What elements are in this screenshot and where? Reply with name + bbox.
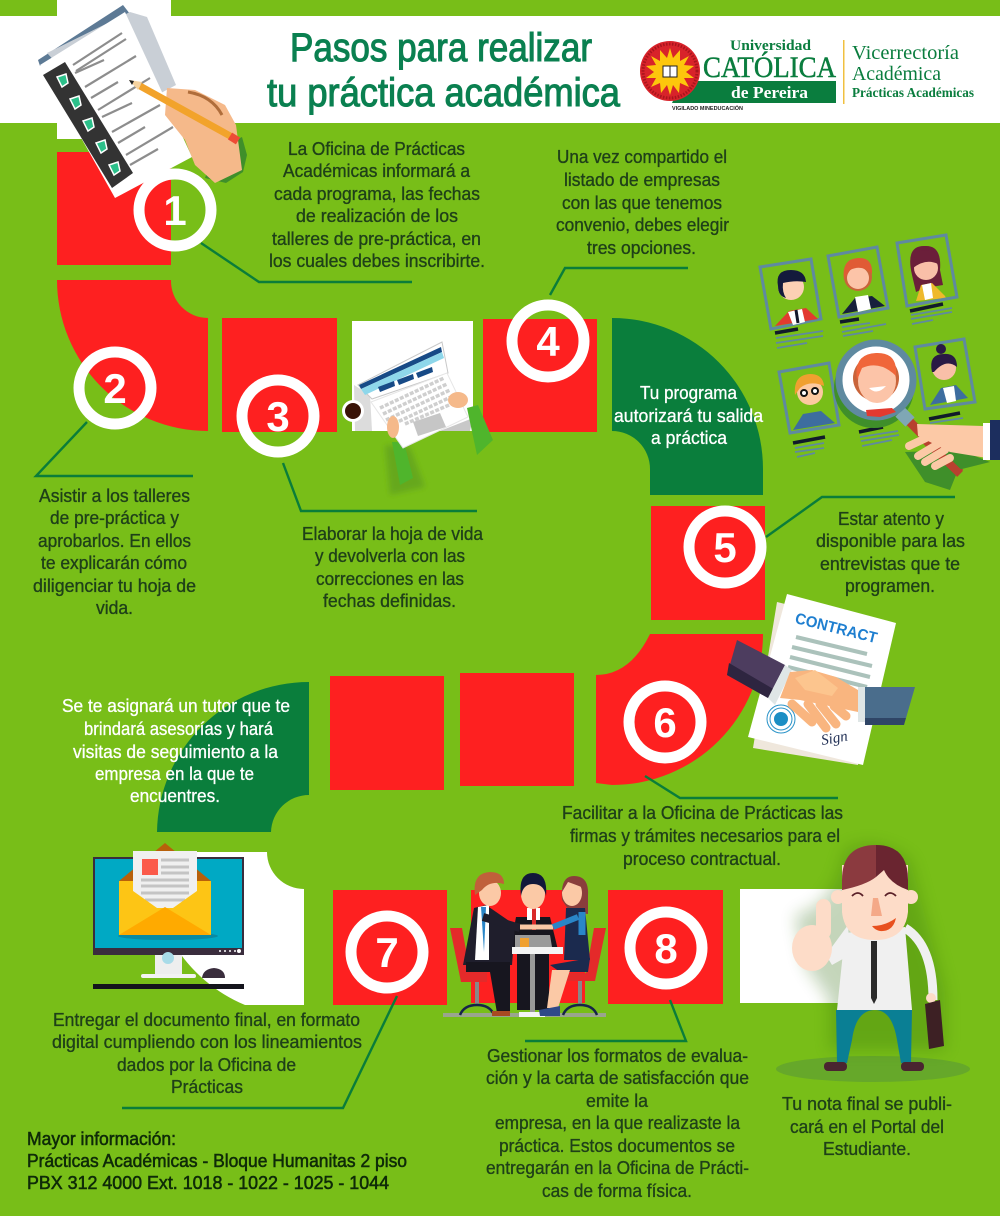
board path: curve 6 [596, 634, 763, 785]
text: program authorisation [614, 382, 764, 448]
text: step 7: Prácticas [171, 1076, 243, 1097]
text: program authorisation: Tu programa [640, 382, 738, 403]
text: step 1: cada programa, las fechas [274, 183, 480, 204]
portrait 3 [897, 235, 957, 324]
step marker 8 [630, 912, 702, 984]
hand [792, 899, 832, 971]
text: contact information: Mayor información: [27, 1128, 176, 1149]
text: step 2 [33, 485, 196, 618]
logo: Universidad Católica de Pereira: Vicerrectoría [852, 42, 959, 64]
text: contact information: Prácticas Académicas - Bloque Humanitas 2 piso [27, 1150, 407, 1171]
step marker 2: 2 [103, 365, 127, 412]
text: step 1: talleres de pre-práctica, en [272, 228, 481, 249]
text: program authorisation: a práctica [651, 427, 728, 448]
text: tutor: brindará asesorías y hará [84, 718, 274, 739]
step marker 7: 7 [375, 929, 399, 976]
step marker 4: 4 [536, 318, 560, 365]
icon: email on monitor [93, 843, 244, 989]
head [831, 845, 918, 940]
text: step 4: con las que tenemos [562, 192, 722, 213]
ground shadow [776, 1056, 970, 1082]
title [267, 26, 621, 115]
arm and briefcase [905, 928, 933, 1000]
logo seal [640, 41, 700, 101]
shirt [837, 927, 912, 1010]
text: step 8: empresa, en la que realizaste la [495, 1112, 741, 1133]
step marker 3: 3 [266, 393, 290, 440]
text: step 7: digital cumpliendo con los lineamientos [52, 1031, 362, 1052]
magnifier [834, 343, 960, 473]
text: step 8: ción y la carta de satisfacción que [486, 1067, 749, 1088]
board path: final white square [740, 889, 855, 1003]
board path: square 4 [483, 319, 597, 432]
text: step 2: aprobarlos. En ellos [38, 530, 191, 551]
text: step 7: dados por la Oficina de [117, 1054, 296, 1075]
board path: blank square left [330, 676, 444, 790]
step marker 2 [79, 352, 151, 424]
right chair [560, 928, 606, 1015]
text: step 6: proceso contractual. [623, 848, 781, 869]
step marker 5: 5 [713, 524, 737, 571]
header band [0, 0, 1000, 139]
text: step 5: programen. [845, 575, 935, 596]
board path: white panel with laptop [352, 321, 473, 431]
board path: curve 2 [57, 280, 208, 431]
board path: meeting square [471, 890, 585, 1003]
text: tutor: empresa en la que te [95, 763, 254, 784]
table and laptop [512, 935, 563, 1017]
text: step 8: práctica. Estos documentos se [499, 1135, 735, 1156]
text: tutor [62, 695, 290, 806]
logo: Universidad Católica de Pereira: de Pereira [731, 83, 809, 102]
text: final grade: Estudiante. [823, 1138, 911, 1159]
text: step 4: listado de empresas [564, 169, 720, 190]
board path: square 5 [651, 506, 765, 620]
tie [871, 941, 877, 1004]
text: step 8: Gestionar los formatos de evalua- [487, 1045, 748, 1066]
text: step 1: Académicas informará a [283, 160, 471, 181]
text: step 4: convenio, debes elegir [556, 214, 729, 235]
woman [520, 876, 590, 1016]
text: tutor: encuentres. [130, 785, 220, 806]
board path: blank square right [460, 673, 574, 786]
step marker 4 [512, 305, 584, 377]
text: step 8 [486, 1045, 749, 1201]
middle man [510, 873, 558, 1010]
text: final grade [782, 1093, 952, 1159]
text: step 1: La Oficina de Prácticas [288, 138, 465, 159]
hand holding magnifier [905, 420, 1000, 490]
text: step 5: disponible para las [816, 530, 965, 551]
text: step 3 [302, 523, 484, 611]
logo: Universidad Católica de Pereira: Prácticas Académicas [852, 85, 974, 100]
board path: green curve [612, 318, 763, 495]
text: step 2: de pre-práctica y [50, 507, 180, 528]
icon: business meeting [443, 872, 606, 1017]
text: step 5: entrevistas que te [820, 553, 960, 574]
text: step 2: diligenciar tu hoja de [33, 575, 196, 596]
board path: square 3 [222, 318, 337, 432]
icon: happy man with thumbs up [776, 844, 970, 1082]
text: tutor: Se te asignará un tutor que te [62, 695, 290, 716]
portrait 5 [915, 339, 975, 423]
step marker 8: 8 [654, 925, 678, 972]
icon: candidate portraits with magnifier [760, 235, 1000, 490]
text: step 5: Estar atento y [838, 508, 945, 529]
text: step 7 [52, 1009, 362, 1097]
portrait 2 [828, 247, 888, 336]
board path: white curve 7 [151, 852, 304, 1005]
text: step 2: te explicarán cómo [41, 552, 187, 573]
step marker 7 [351, 916, 423, 988]
title: Pasos para realizar [290, 26, 592, 70]
text: final grade: Tu nota final se publi- [782, 1093, 952, 1114]
text: contact information [27, 1128, 407, 1193]
logo: Universidad Católica de Pereira: Universidad [730, 38, 811, 54]
text: step 3: y devolverla con las [315, 545, 465, 566]
text: tutor: visitas de seguimiento a la [73, 741, 279, 762]
text: step 8: cas de forma física. [542, 1180, 692, 1201]
logo: Universidad Católica de Pereira: VIGILADO MINEDUCACIÓN [672, 104, 743, 112]
text: step 1 [269, 138, 485, 271]
step marker 5 [689, 511, 761, 583]
text: step 5 [816, 508, 965, 596]
text: step 1: de realización de los [296, 205, 458, 226]
icon: laptop with hands [342, 342, 493, 495]
text: step 8: emite la [586, 1090, 649, 1111]
text: step 3: correcciones en las [316, 568, 464, 589]
text: step 2: Asistir a los talleres [39, 485, 190, 506]
step marker 6: 6 [653, 699, 677, 746]
text: step 8: entregarán en la Oficina de Prácti- [486, 1157, 749, 1178]
step marker 1: 1 [163, 187, 187, 234]
left chair [450, 928, 494, 1015]
logo: Universidad Católica de Pereira: Académica [852, 63, 941, 85]
text: step 3: fechas definidas. [323, 590, 456, 611]
board path: square 7 [333, 890, 447, 1005]
text: step 6: firmas y trámites necesarios para el [570, 825, 840, 846]
portrait 4 [779, 363, 839, 457]
text: program authorisation: autorizará tu salida [614, 405, 764, 426]
step marker 6 [629, 686, 701, 758]
step marker 1 [139, 174, 211, 246]
text: step 7: Entregar el documento final, en formato [53, 1009, 360, 1030]
board path: tutor green curve [157, 682, 309, 832]
board path: square 1 [57, 152, 171, 265]
text: contact information: PBX 312 4000 Ext. 1018 - 1022 - 1025 - 1044 [27, 1172, 389, 1193]
logo: Universidad Católica de Pereira [640, 38, 974, 112]
text: step 1: los cuales debes inscribirte. [269, 250, 485, 271]
text: step 2: vida. [96, 597, 133, 618]
text: step 6: Facilitar a la Oficina de Prácticas las [562, 802, 843, 823]
text: step 3: Elaborar la hoja de vida [302, 523, 484, 544]
icon: contract and handshake: CONTRACT [793, 610, 879, 647]
text: step 4 [556, 146, 729, 258]
text: step 4: Una vez compartido el [557, 146, 727, 167]
board path: square 8 [608, 890, 723, 1004]
soft glow behind figure [795, 844, 945, 1050]
step marker 3 [242, 380, 314, 452]
text: step 6 [562, 802, 843, 869]
title: tu práctica académica [267, 71, 621, 115]
left man [463, 872, 520, 1016]
logo: Universidad Católica de Pereira: CATÓLICA [703, 51, 836, 84]
icon: contract and handshake: Sign [820, 729, 849, 749]
shoes [824, 1062, 924, 1071]
trousers [836, 1010, 912, 1063]
icon: checklist and hand with pencil [38, 5, 247, 198]
icon: contract and handshake [727, 594, 915, 765]
text: step 4: tres opciones. [587, 237, 696, 258]
connector lines [36, 243, 955, 1108]
logo green bar [672, 81, 836, 103]
portrait 1 [760, 259, 823, 348]
text: final grade: cará en el Portal del [790, 1116, 944, 1137]
